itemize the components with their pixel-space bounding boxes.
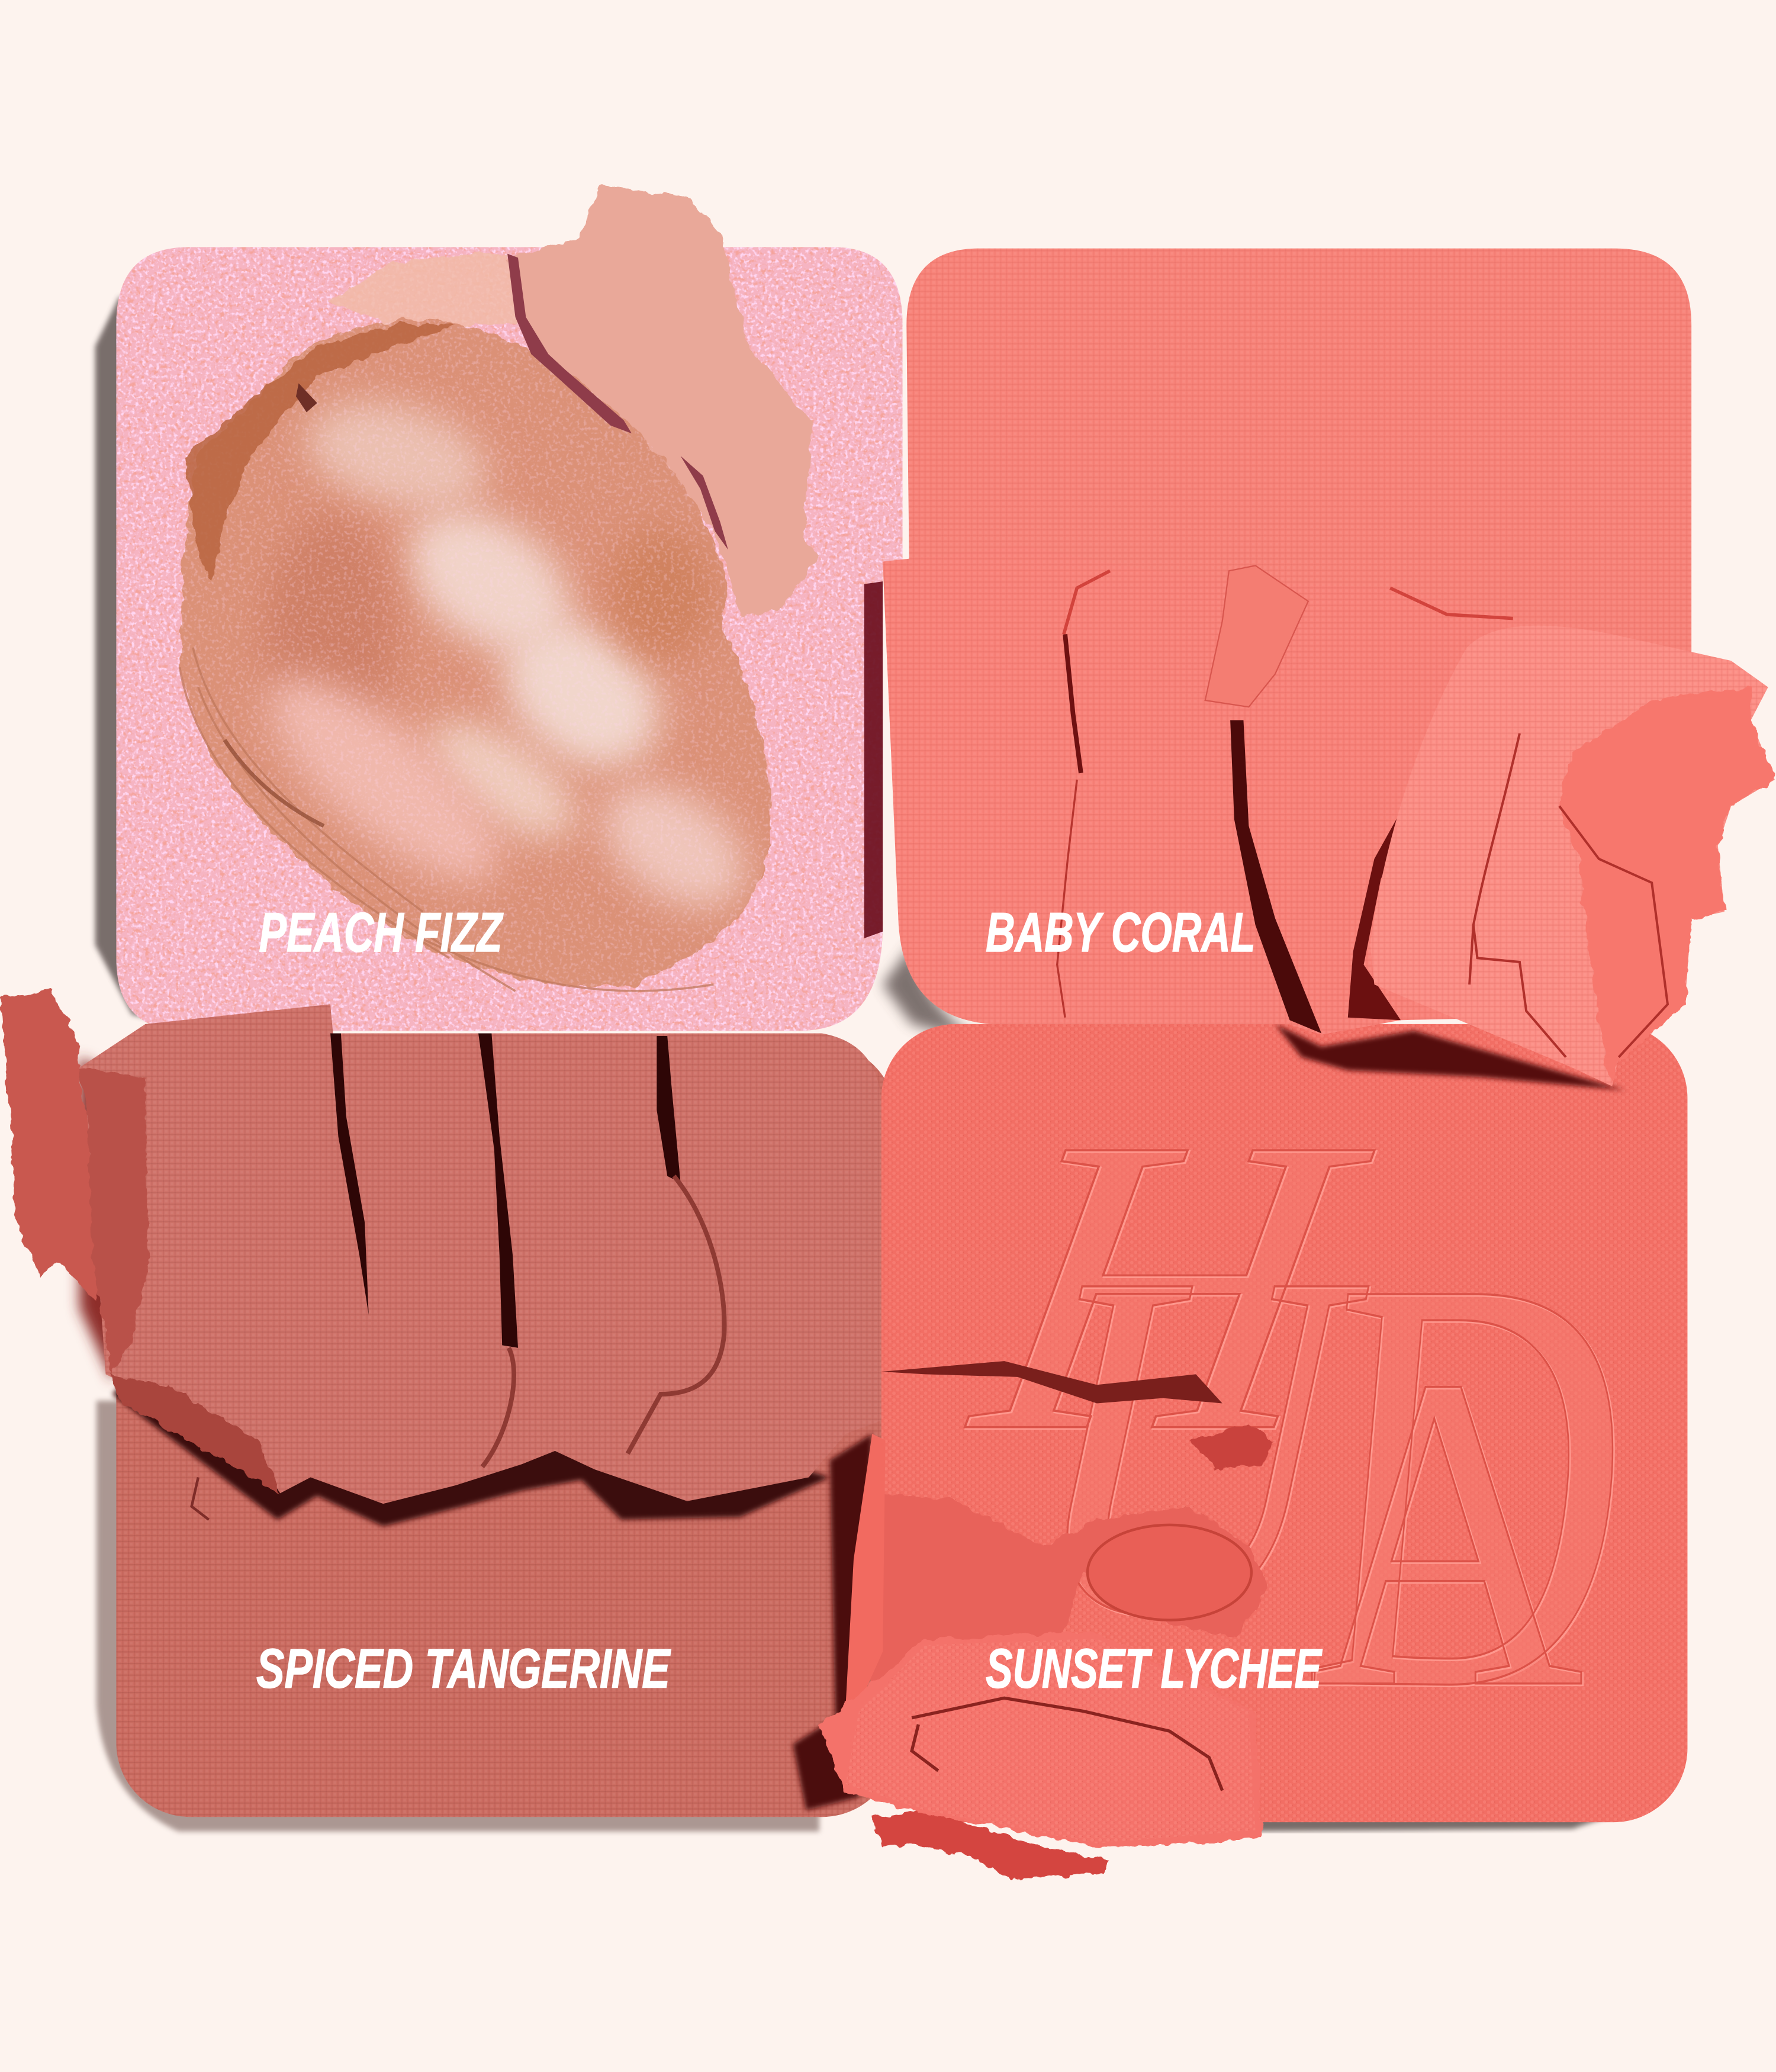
- torn wedge near top: [1205, 565, 1308, 707]
- swiped upper layer: [79, 1004, 881, 1504]
- panel: Baby Coral swatch: [864, 249, 1775, 1090]
- label: Baby Coral: BABY CORAL: [986, 901, 1256, 963]
- monogram highlight layer: H: [919, 1052, 1426, 1520]
- monogram shadow layer: A: [1308, 1283, 1584, 1781]
- shadow of smear on spiced pan: [793, 1434, 872, 1810]
- shadow cast on peach: [864, 581, 883, 938]
- swiped flat layer: [883, 546, 1520, 1035]
- upper right powder chunk: [509, 185, 819, 616]
- crumbled chunk: [1189, 1424, 1275, 1469]
- crack across the monogram: [881, 1361, 1222, 1404]
- monogram shadow layer: [918, 1051, 1657, 1812]
- torn dark creases: [912, 1698, 1222, 1791]
- cracks in peach fizz: [296, 254, 728, 550]
- lower left torn lip: [111, 1374, 280, 1493]
- peach fizz glitter texture: [106, 238, 912, 1044]
- swiped recessed area: [859, 1493, 1269, 1718]
- left torn edge: [79, 1068, 148, 1374]
- monogram shadow layer: H: [918, 1051, 1424, 1519]
- monogram highlight layer: D: [1292, 1155, 1658, 1813]
- cast shadows on the background: [95, 297, 1619, 1832]
- cracks in spiced tangerine: [330, 1034, 681, 1348]
- monogram highlight layer: [919, 1052, 1658, 1813]
- label: Spiced Tangerine: SPICED TANGERINE: [256, 1637, 671, 1699]
- monogram highlight layer: U: [983, 1172, 1404, 1720]
- left powder clump shadow: [79, 1057, 159, 1381]
- cracks in lump: [1469, 733, 1668, 1057]
- left powder clump: [0, 991, 106, 1302]
- monogram highlight layer: A: [1310, 1285, 1585, 1783]
- panel: Peach Fizz swatch: [106, 185, 912, 1044]
- deep tear through layer: [1230, 720, 1321, 1034]
- lower powder scatter: [872, 1810, 1110, 1879]
- smear highlights and shading: [172, 317, 793, 1004]
- label: Sunset Lychee: SUNSET LYCHEE: [986, 1637, 1323, 1699]
- shadow cast on sunset pan: [1275, 1024, 1626, 1090]
- baby coral pan: [906, 249, 1691, 793]
- shadow under the swiped layer: [112, 1374, 830, 1526]
- peach fizz pan: [116, 247, 903, 1031]
- crumbled right clump: [1559, 687, 1775, 1083]
- cracks in baby coral: [1057, 571, 1513, 1018]
- brown crust along the smear edge: [185, 324, 456, 581]
- curved score line: [482, 1176, 725, 1467]
- small chip below the swipe: [192, 1478, 209, 1520]
- monogram shadow layer: U: [982, 1170, 1402, 1719]
- panel: Sunset Lychee swatch: [793, 1024, 1687, 1879]
- icon: embossed HUDA monogram: [918, 1051, 1658, 1813]
- lower pressed smear: [819, 1632, 1262, 1848]
- label: Peach Fizz: PEACH FIZZ: [259, 901, 504, 963]
- left smear strip: [846, 1434, 886, 1704]
- concentric swipe lines: [180, 648, 713, 991]
- scooped oval: [1088, 1525, 1251, 1620]
- monogram shadow layer: D: [1291, 1154, 1657, 1812]
- panel: Spiced Tangerine swatch: [0, 991, 896, 1817]
- central swiped smear: [181, 320, 771, 987]
- spiced tangerine pan: [116, 1044, 896, 1817]
- sunset lychee pan: [881, 1024, 1687, 1822]
- peach flake at top of smear: [328, 251, 518, 328]
- light pressed lump: [1370, 626, 1775, 1086]
- tear left of upper lump: [1348, 740, 1440, 1020]
